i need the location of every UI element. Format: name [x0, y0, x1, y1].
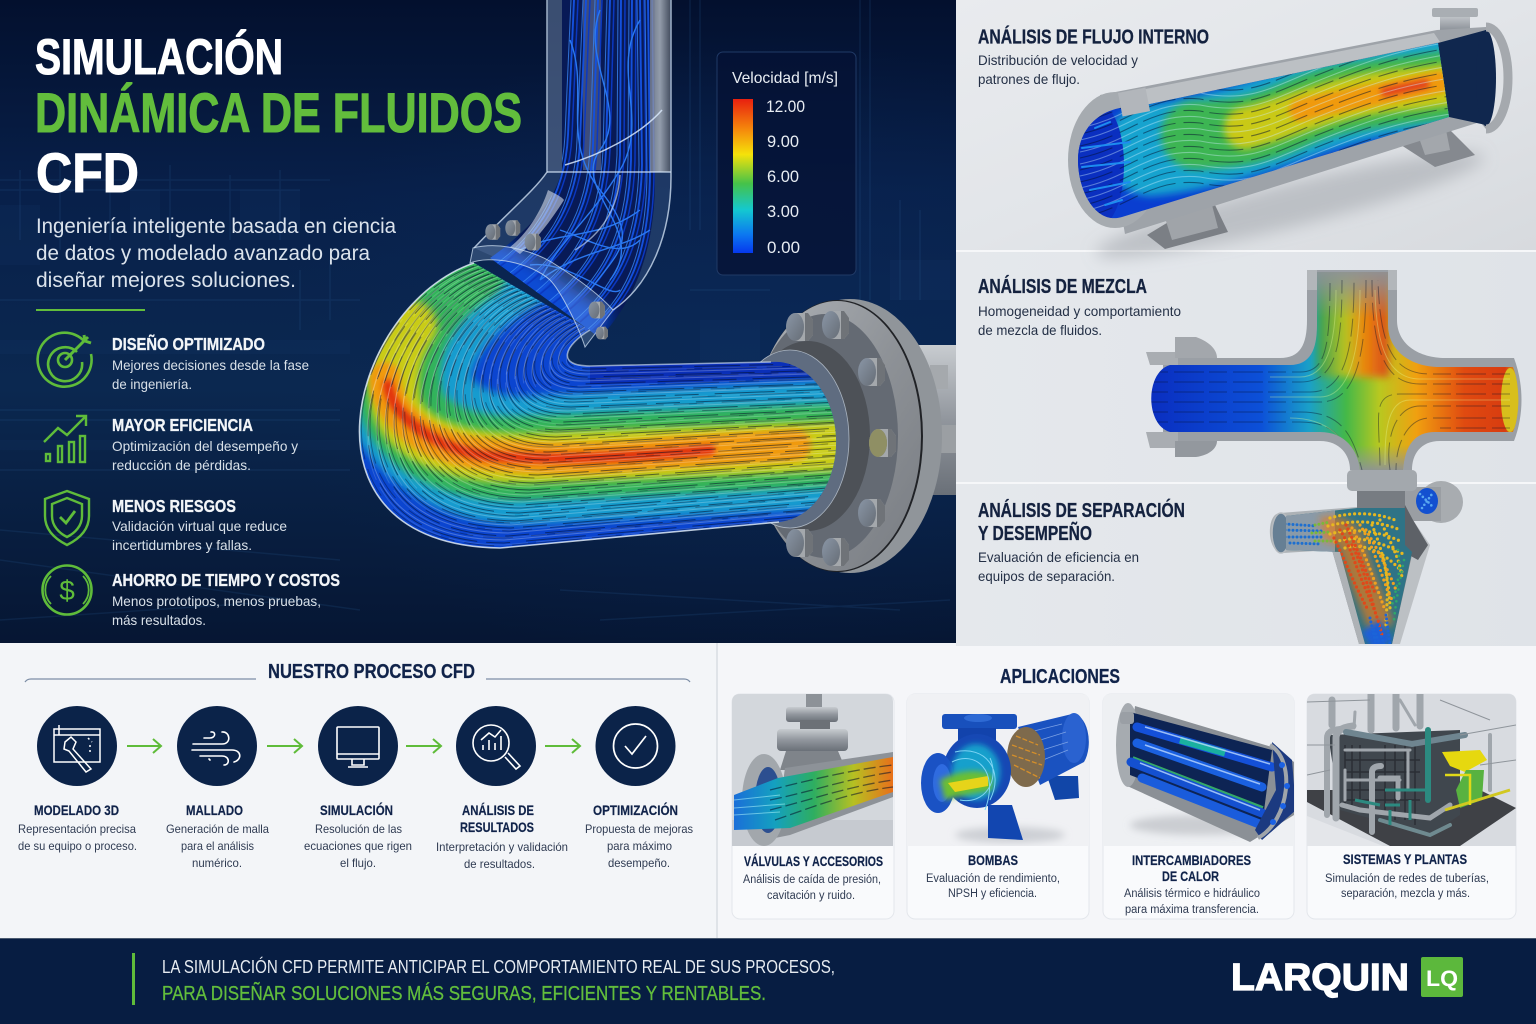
card: válvulas y accesorios: [732, 694, 894, 919]
logo: LARQUIN: [1231, 957, 1409, 999]
step: mallado: [166, 706, 269, 870]
card: válvulas y accesorios: cavitación y ruido.: [767, 890, 855, 902]
step: simulación: Resolución de las: [315, 822, 402, 836]
footer banner: [0, 938, 1536, 1024]
process heading: [25, 661, 690, 683]
footer message: LA SIMULACIÓN CFD PERMITE ANTICIPAR EL COMPORTAMIENTO REAL DE SUS PROCESOS,: [162, 956, 835, 977]
card: intercambiadores de calor: [1103, 694, 1296, 919]
benefit: mayor eficiencia: [44, 415, 298, 473]
card: intercambiadores de calor: INTERCAMBIADORES: [1132, 853, 1251, 868]
benefit: ahorro de tiempo y costos: [42, 566, 340, 628]
illustration: cyclone separator: [1270, 470, 1463, 646]
heading: flujo interno: Distribución de velocidad y: [978, 52, 1138, 68]
illustration: mixing tee: [1146, 270, 1522, 470]
heading: separación: [978, 498, 1185, 584]
step: análisis de resultados: ANÁLISIS DE: [462, 802, 534, 818]
benefit: menos riesgos: [45, 491, 287, 553]
arrow: [406, 739, 441, 753]
illustration: internal flow shell vessel: [1068, 8, 1508, 275]
step: simulación: [304, 706, 412, 870]
heading: mezcla: [978, 275, 1181, 338]
card: bombas: Evaluación de rendimiento,: [926, 873, 1060, 885]
card: sistemas y plantas: separación, mezcla y más.: [1341, 888, 1470, 900]
benefit: mayor eficiencia: Optimización del desempeño y: [112, 438, 298, 454]
title: SIMULACIÓN: [35, 29, 283, 85]
benefit: ahorro de tiempo y costos: $: [59, 575, 75, 606]
step: mallado: MALLADO: [186, 802, 243, 818]
step: optimización: desempeño.: [608, 856, 670, 870]
velocity legend: 3.00: [767, 202, 799, 221]
title: CFD: [36, 141, 139, 204]
velocity legend: 0.00: [767, 238, 800, 257]
benefit: diseño optimizado: de ingeniería.: [112, 376, 192, 392]
subtitle: de datos y modelado avanzado para: [36, 241, 370, 265]
benefit: diseño optimizado: DISEÑO OPTIMIZADO: [112, 333, 265, 354]
CFD velocity field in elbow: [360, 263, 836, 548]
step: mallado: numérico.: [192, 856, 242, 870]
heading: mezcla: Homogeneidad y comportamiento: [978, 303, 1181, 319]
arrow: [545, 739, 580, 753]
velocity legend: 12.00: [766, 97, 805, 116]
title: [35, 29, 522, 204]
bolted collar: [470, 220, 613, 347]
card: bombas: NPSH y eficiencia.: [948, 888, 1037, 900]
process heading: NUESTRO PROCESO CFD: [268, 661, 475, 683]
icon: growth chart: [44, 416, 86, 462]
heading: flujo interno: [978, 26, 1209, 87]
step: optimización: OPTIMIZACIÓN: [593, 801, 678, 818]
step: simulación: el flujo.: [340, 856, 376, 870]
step: modelado 3D: Representación precisa: [18, 822, 136, 836]
heading: separación: Y DESEMPEÑO: [978, 522, 1092, 545]
benefit: mayor eficiencia: reducción de pérdidas.: [112, 457, 251, 473]
heading: separación: equipos de separación.: [978, 568, 1115, 584]
subtitle: diseñar mejores soluciones.: [36, 268, 296, 292]
benefit: menos riesgos: Validación virtual que reduce: [112, 518, 287, 534]
subtitle: Ingeniería inteligente basada en ciencia: [36, 214, 396, 238]
panel: right analysis column background: [956, 0, 1536, 646]
title: DINÁMICA DE FLUIDOS: [35, 81, 522, 144]
step: simulación: SIMULACIÓN: [320, 801, 393, 818]
heading: flujo interno: ANÁLISIS DE FLUJO INTERNO: [978, 26, 1209, 48]
step: modelado 3D: MODELADO 3D: [34, 802, 119, 818]
step: análisis de resultados: RESULTADOS: [460, 819, 534, 835]
step: modelado 3D: [18, 706, 137, 853]
hero background: [0, 0, 956, 643]
heading: separación: ANÁLISIS DE SEPARACIÓN: [978, 498, 1185, 522]
card: sistemas y plantas: Simulación de redes de tuberías,: [1325, 873, 1489, 885]
velocity legend: 9.00: [767, 132, 799, 151]
logo: LQ: [1426, 966, 1458, 991]
heading: flujo interno: patrones de flujo.: [978, 71, 1080, 87]
step: mallado: Generación de malla: [166, 822, 269, 836]
icon: magnifier with chart: [473, 725, 520, 769]
card: intercambiadores de calor: para máxima transferencia.: [1125, 904, 1259, 916]
pipe glass outline: [359, 263, 779, 548]
step: optimización: Propuesta de mejoras: [585, 822, 693, 836]
card: intercambiadores de calor: DE CALOR: [1162, 869, 1219, 884]
transparent vertical pipe: [470, 0, 671, 350]
icon: target: [38, 333, 92, 387]
subtitle: [36, 214, 396, 292]
velocity legend: Velocidad [m/s]: [732, 70, 838, 87]
card: bombas: BOMBAS: [968, 853, 1018, 868]
step: análisis de resultados: de resultados.: [464, 857, 535, 871]
panel: hero: [0, 0, 956, 643]
velocity legend: [717, 52, 856, 275]
step: análisis de resultados: [436, 706, 568, 871]
step: modelado 3D: de su equipo o proceso.: [18, 839, 137, 853]
icon: dollar coin: [42, 566, 92, 614]
velocity legend: 6.00: [767, 167, 799, 186]
panel: process: [0, 643, 956, 938]
footer message: PARA DISEÑAR SOLUCIONES MÁS SEGURAS, EFICIENTES Y RENTABLES.: [162, 981, 766, 1005]
benefit: ahorro de tiempo y costos: más resultados.: [112, 612, 206, 628]
icon: shield: [45, 491, 89, 545]
card: válvulas y accesorios: VÁLVULAS Y ACCESORIOS: [744, 854, 883, 869]
card: bombas: [907, 694, 1089, 919]
benefit: ahorro de tiempo y costos: AHORRO DE TIEMPO Y COSTOS: [112, 570, 340, 590]
heading: separación: Evaluación de eficiencia en: [978, 549, 1139, 565]
step: simulación: ecuaciones que rigen: [304, 839, 412, 853]
icon: monitor: [337, 727, 379, 767]
icon: wind flow: [192, 732, 240, 765]
step: optimización: para máximo: [607, 839, 672, 853]
card: intercambiadores de calor: Análisis térmico e hidráulico: [1124, 888, 1260, 900]
panel: applications: [716, 643, 1536, 938]
card: sistemas y plantas: [1307, 694, 1516, 919]
arrow: [127, 739, 161, 753]
card: sistemas y plantas: SISTEMAS Y PLANTAS: [1343, 852, 1467, 867]
footer message: [162, 956, 835, 1005]
benefit: mayor eficiencia: MAYOR EFICIENCIA: [112, 415, 253, 435]
icon: check circle: [614, 724, 658, 768]
applications heading: APLICACIONES: [1000, 666, 1120, 688]
benefit: diseño optimizado: Mejores decisiones desde la fase: [112, 357, 309, 373]
flange and downstream steel pipe: [760, 299, 956, 573]
heading: mezcla: de mezcla de fluidos.: [978, 322, 1102, 338]
step: análisis de resultados: Interpretación y validación: [436, 840, 568, 854]
benefit: menos riesgos: MENOS RIESGOS: [112, 496, 236, 516]
arrow: [267, 739, 302, 753]
benefit: ahorro de tiempo y costos: Menos prototipos, menos pruebas,: [112, 593, 321, 609]
step: mallado: para el análisis: [181, 839, 254, 853]
illustration: CFD pipe elbow with flange: [340, 0, 956, 573]
benefit: diseño optimizado: [38, 333, 309, 392]
card: válvulas y accesorios: Análisis de caída de presión,: [743, 874, 881, 886]
benefit: menos riesgos: incertidumbres y fallas.: [112, 537, 252, 553]
icon: 3d model window: [54, 725, 100, 772]
heading: mezcla: ANÁLISIS DE MEZCLA: [978, 275, 1147, 298]
step: optimización: [585, 706, 693, 870]
